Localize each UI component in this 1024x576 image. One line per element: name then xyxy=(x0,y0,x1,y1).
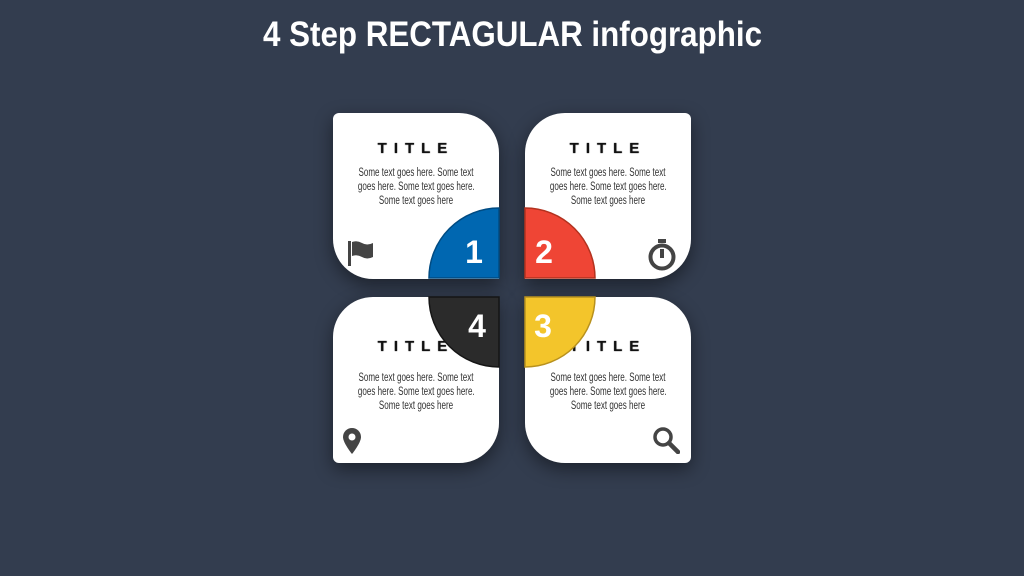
quadrant 1 blue: 1 xyxy=(465,234,483,270)
text 3: Some text goes here xyxy=(571,400,645,412)
text 4: goes here. Some text goes here. xyxy=(358,386,475,398)
text 3: goes here. Some text goes here. xyxy=(550,386,667,398)
icon: magnifier xyxy=(653,427,680,454)
panel: card 1 xyxy=(333,113,499,279)
icon: stopwatch xyxy=(648,239,676,270)
text 2: goes here. Some text goes here. xyxy=(550,181,667,193)
text 4 xyxy=(358,372,475,412)
quadrant 4 dark: 4 xyxy=(468,308,486,344)
quadrant 3 yellow: 3 xyxy=(534,308,552,344)
heading 4: TITLE xyxy=(378,338,454,355)
icon: map pin xyxy=(343,428,361,454)
text 2 xyxy=(550,167,667,207)
quadrant 2 red xyxy=(525,208,595,278)
panel: card 3 xyxy=(525,297,691,463)
quadrant 1 blue xyxy=(429,208,499,278)
quadrant 3 yellow xyxy=(525,297,595,367)
quadrant 4 dark xyxy=(429,297,499,367)
text 1 xyxy=(358,167,475,207)
text 3: Some text goes here. Some text xyxy=(551,372,665,384)
title: 4 Step RECTAGULAR infographic xyxy=(263,15,762,54)
text 2: Some text goes here xyxy=(571,195,645,207)
icon: flag xyxy=(348,241,373,266)
heading 2: TITLE xyxy=(570,140,646,157)
text 3 xyxy=(550,372,667,412)
quadrant 2 red: 2 xyxy=(535,234,553,270)
text 2: Some text goes here. Some text xyxy=(551,167,665,179)
text 1: Some text goes here. Some text xyxy=(359,167,473,179)
panel: card 4 xyxy=(333,297,499,463)
panel: card 2 xyxy=(525,113,691,279)
text 4: Some text goes here. Some text xyxy=(359,372,473,384)
heading 1: TITLE xyxy=(378,140,454,157)
text 1: Some text goes here xyxy=(379,195,453,207)
heading 3: TITLE xyxy=(570,338,646,355)
text 4: Some text goes here xyxy=(379,400,453,412)
text 1: goes here. Some text goes here. xyxy=(358,181,475,193)
